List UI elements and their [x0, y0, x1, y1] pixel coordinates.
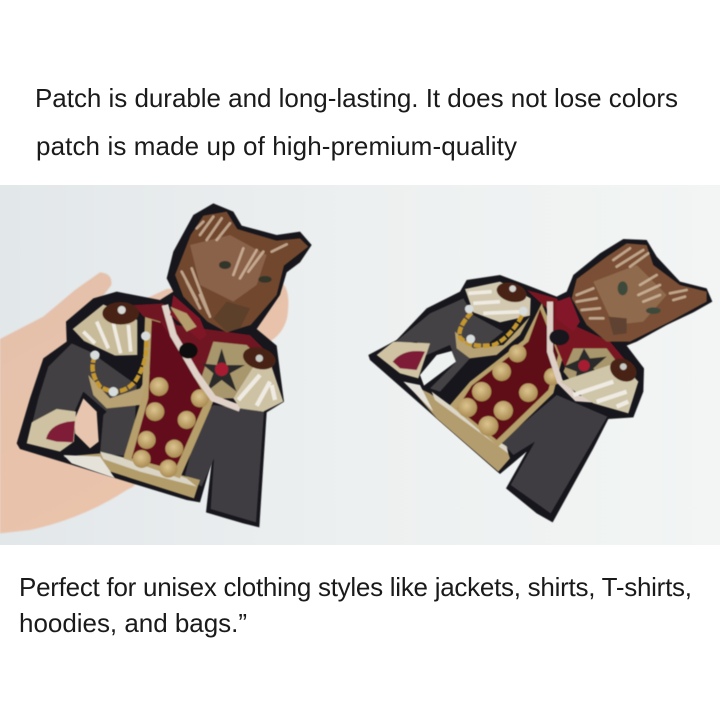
- gold chain: [459, 312, 523, 346]
- hand holding the patch: [0, 272, 288, 533]
- text: unisex styles line two: hoodies, and bags.”: [19, 608, 247, 638]
- gold chain: [93, 337, 146, 391]
- cuff: [377, 342, 430, 378]
- hem: [405, 382, 510, 472]
- patch black outline: [17, 203, 312, 527]
- right epaulet: [233, 362, 283, 412]
- cat head: [572, 243, 707, 342]
- red velvet vest: [450, 303, 563, 447]
- collar: [557, 297, 580, 332]
- gold shoulder drape: [455, 317, 530, 358]
- cuff: [27, 409, 76, 452]
- white braid: [550, 302, 620, 402]
- hem: [63, 453, 200, 498]
- sleeve felt: [392, 298, 503, 392]
- cat head: [175, 212, 308, 332]
- brass buttons: [508, 344, 526, 362]
- hole in sleeve: [420, 351, 456, 386]
- sleeve and body felt: [27, 343, 137, 457]
- patch black outline: [368, 239, 712, 522]
- black gem: [179, 343, 198, 359]
- white braid: [165, 305, 240, 408]
- cat eyes: [219, 261, 231, 269]
- brass buttons: [150, 377, 168, 396]
- chest: red with star: [133, 303, 263, 398]
- trouser felt: [185, 405, 264, 522]
- cat eyes: [618, 281, 628, 295]
- photo panel: patch flat on surface: [360, 185, 720, 545]
- left epaulet: [73, 304, 137, 356]
- gold shoulder drape: [88, 372, 150, 408]
- black gem: [549, 329, 569, 345]
- trouser felt: [502, 395, 607, 513]
- text: unisex styles line one: Perfect for unisex clothing styles like jackets, shirts, T-shirts,: [19, 572, 692, 602]
- text: durability line: Patch is durable and long-lasting. It does not lose colors: [35, 83, 678, 113]
- chest: red with star: [527, 290, 627, 388]
- upper epaulet: [465, 282, 531, 322]
- text: quality line: patch is made up of high-premium-quality: [36, 131, 517, 161]
- hole in sleeve showing hand: [75, 398, 99, 448]
- lower epaulet: [560, 362, 638, 413]
- red velvet vest: [123, 317, 213, 478]
- collar: [170, 295, 207, 340]
- photo panel: patch held in hand: [0, 185, 360, 545]
